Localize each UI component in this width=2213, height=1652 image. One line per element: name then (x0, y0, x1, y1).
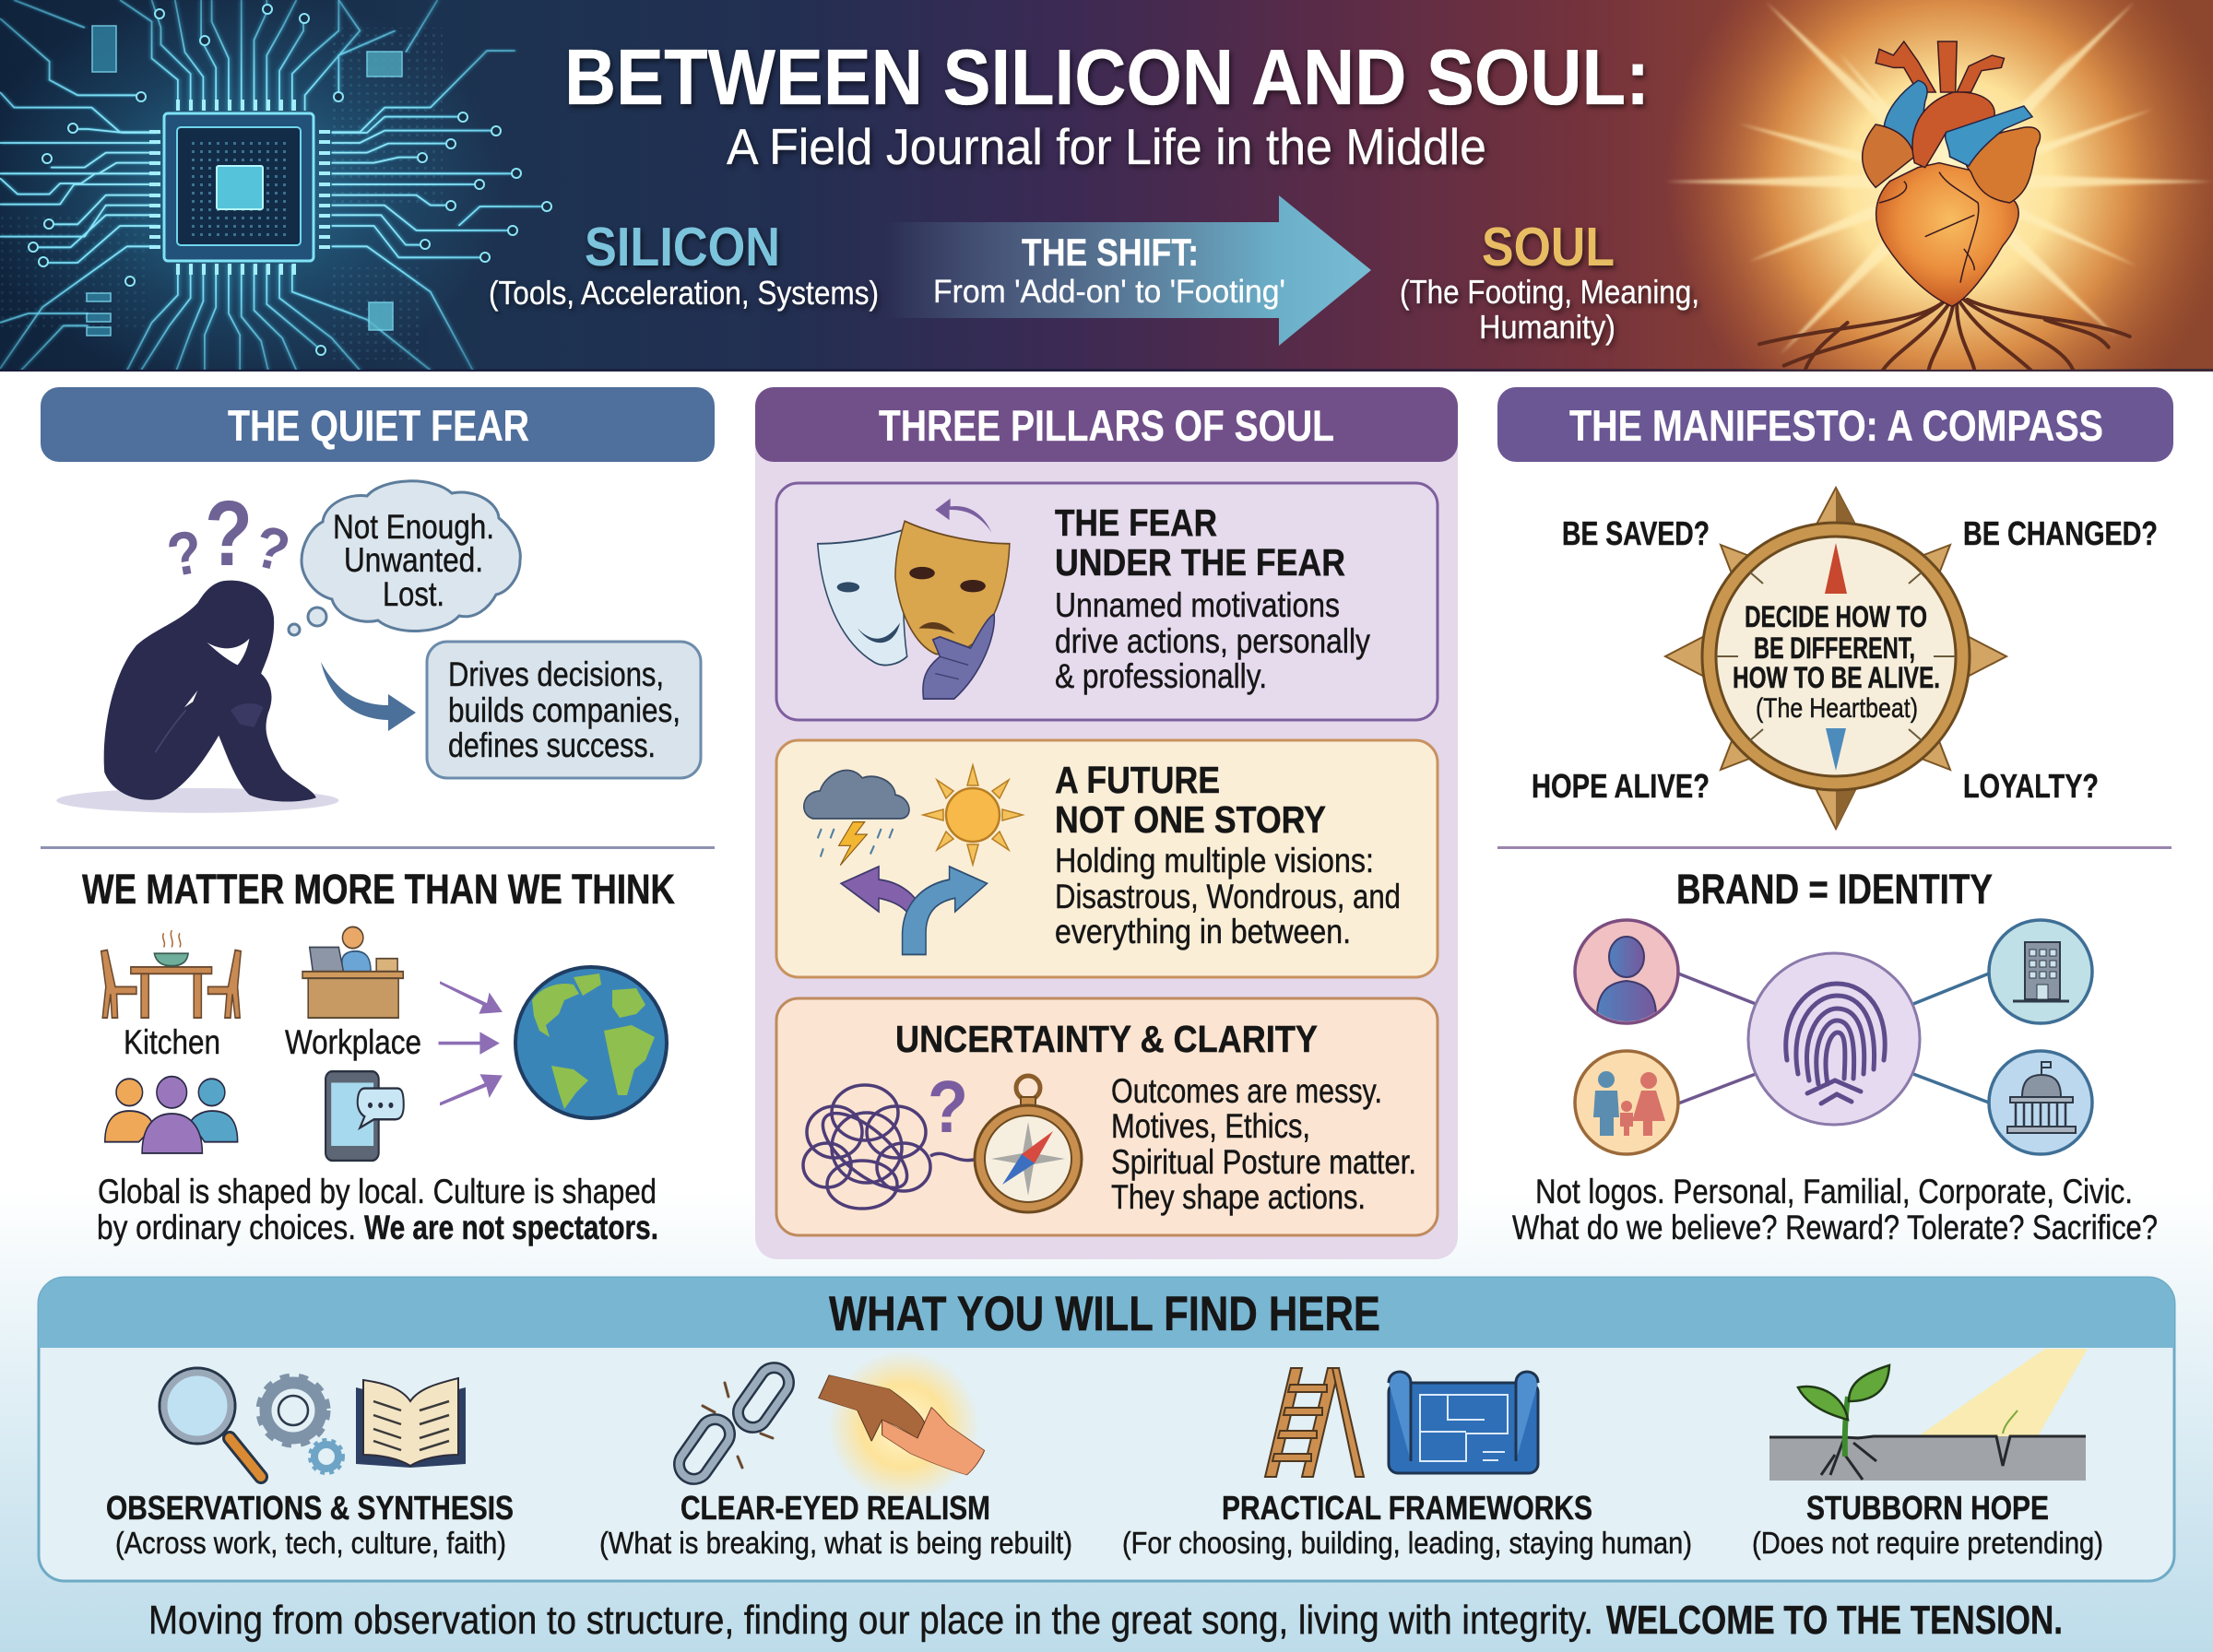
text: global is shaped by local: Global is shaped by local. Culture is shaped (98, 1173, 657, 1210)
icon: fingerprint (1748, 953, 1920, 1125)
callout: drives decisions: builds companies, (448, 691, 680, 729)
item: stubborn hope (1752, 1349, 2103, 1560)
icon: phone with speech bubble (325, 1071, 404, 1161)
icon: masks (818, 499, 1010, 699)
text: decide how to be different: HOW TO BE ALIVE. (1733, 661, 1940, 694)
callout: drives decisions: defines success. (448, 726, 656, 764)
labels: compass questions: BE CHANGED? (1963, 514, 2158, 552)
sublabel: for choosing: (For choosing, building, leading, staying human) (1122, 1526, 1692, 1560)
icon: gears (259, 1376, 343, 1473)
footer text: Moving from observation to structure, finding our place in the great song, living with integrity. (148, 1598, 1593, 1643)
thought bubble: Lost. (383, 575, 444, 613)
text: decide how to be different: (The Heartbeat) (1756, 693, 1918, 724)
icon: question marks: ? (248, 513, 296, 584)
heading: what you will find here: WHAT YOU WILL FIND HERE (829, 1287, 1380, 1341)
panel: the quiet fear (41, 387, 715, 1246)
icon: tangle (803, 1085, 974, 1209)
labels: compass questions: LOYALTY? (1963, 767, 2099, 805)
icon: blueprint (1389, 1372, 1538, 1473)
sublabel: what is breaking: (What is breaking, what is being rebuilt) (599, 1526, 1072, 1560)
callout: drives decisions: Drives decisions, (448, 655, 664, 693)
icon: corporate building (1989, 920, 2092, 1023)
heading: brand equals identity: BRAND = IDENTITY (1676, 866, 1993, 913)
card: a future not one story (776, 740, 1438, 977)
soul label: Humanity) (1479, 308, 1615, 346)
sublabel: does not require pretending: (Does not require pretending) (1752, 1526, 2103, 1560)
icon: ladder (1265, 1368, 1364, 1477)
icon: question marks: ? (205, 482, 253, 585)
icon: diverging arrows (841, 867, 987, 954)
header banner (0, 0, 2213, 372)
icon: pocket compass (975, 1076, 1082, 1212)
item: practical frameworks (1122, 1368, 1692, 1560)
item: clear-eyed realism (599, 1351, 1072, 1560)
heading: uncertainty and clarity: UNCERTAINTY & CLARITY (895, 1018, 1318, 1060)
icon: personal (1575, 920, 1678, 1023)
icon: question marks: ? (162, 516, 207, 590)
text: the fear under the fear: drive actions, personally (1055, 622, 1370, 660)
icon: workplace desk (302, 926, 403, 1018)
card: the fear under the fear (776, 483, 1438, 720)
icon: kitchen table (101, 930, 241, 1018)
icon: storm cloud (804, 771, 909, 866)
panel: the manifesto (1497, 387, 2173, 1246)
item: observations and synthesis (106, 1368, 514, 1560)
thought bubble: Not Enough. (333, 508, 494, 546)
text: decide how to be different: DECIDE HOW TO (1745, 600, 1927, 633)
icon: question mark: ? (928, 1066, 968, 1148)
soul label: SOUL (1482, 217, 1615, 277)
thought bubble (289, 481, 520, 635)
text: global is shaped by local: by ordinary choices. (97, 1209, 356, 1246)
icon: question marks (162, 482, 296, 590)
icon: light beam (1918, 1349, 2088, 1436)
text: a future not one story: Disastrous, Wondrous, and (1055, 878, 1401, 915)
icon: glowing heart with roots (1668, 0, 2213, 370)
icon: broken chain (673, 1362, 795, 1485)
soul label: (The Footing, Meaning, (1400, 273, 1699, 311)
text: a future not one story (1055, 759, 1401, 950)
heading: three pillars of soul (755, 387, 1458, 462)
card: uncertainty and clarity (776, 998, 1438, 1235)
arrows: local to global (439, 981, 503, 1106)
icon: civic building (1989, 1051, 2092, 1154)
heading: the quiet fear (41, 387, 715, 462)
icon: three people (105, 1077, 238, 1153)
icon: open book (356, 1378, 466, 1468)
heading: the quiet fear: THE QUIET FEAR (228, 401, 529, 450)
text: decide how to be different (1733, 600, 1940, 724)
arrow: the shift (885, 195, 1371, 346)
text: outcomes are messy (1111, 1072, 1416, 1216)
heading: three pillars of soul: THREE PILLARS OF SOUL (879, 401, 1334, 450)
sublabel: across work: (Across work, tech, culture, faith) (115, 1526, 506, 1560)
heading: the manifesto: THE MANIFESTO: A COMPASS (1569, 401, 2103, 450)
label: kitchen: Kitchen (124, 1023, 220, 1061)
text: outcomes are messy: Outcomes are messy. (1111, 1072, 1382, 1110)
footer text: WELCOME TO THE TENSION. (1606, 1598, 2063, 1643)
label: observations and synthesis: OBSERVATIONS & SYNTHESIS (106, 1489, 514, 1527)
silicon label: SILICON (585, 217, 780, 277)
title: BETWEEN SILICON AND SOUL: (564, 34, 1650, 122)
text: decide how to be different: BE DIFFERENT, (1754, 631, 1915, 665)
silicon label: (Tools, Acceleration, Systems) (489, 274, 879, 312)
shift label: THE SHIFT: (1022, 230, 1199, 274)
thought bubble: Unwanted. (344, 541, 483, 579)
text: a future not one story: Holding multiple visions: (1055, 842, 1374, 879)
heading: we matter more than we think: WE MATTER MORE THAN WE THINK (82, 866, 675, 913)
panel: what you will find here (39, 1278, 2174, 1581)
icon: cracked concrete (1769, 1436, 2086, 1481)
text: the fear under the fear (1055, 502, 1370, 695)
text: global is shaped by local: We are not spectators. (364, 1209, 658, 1246)
icon: sprout (1798, 1365, 2018, 1457)
heading: the manifesto (1497, 387, 2173, 462)
labels: compass questions: BE SAVED? (1562, 514, 1710, 552)
label: stubborn hope: STUBBORN HOPE (1806, 1489, 2049, 1527)
subtitle: A Field Journal for Life in the Middle (727, 118, 1486, 175)
shift description: From 'Add-on' to 'Footing' (933, 274, 1285, 310)
diagram: identity network (1575, 920, 2092, 1154)
icon: magnifier (160, 1368, 261, 1477)
label: workplace: Workplace (285, 1023, 421, 1061)
text: the fear under the fear: UNDER THE FEAR (1055, 541, 1345, 584)
labels: compass questions: HOPE ALIVE? (1532, 767, 1710, 805)
text: the fear under the fear: Unnamed motivations (1055, 586, 1340, 624)
text: outcomes are messy: They shape actions. (1111, 1178, 1366, 1216)
label: practical frameworks: PRACTICAL FRAMEWORKS (1222, 1489, 1592, 1527)
text: outcomes are messy: Motives, Ethics, (1111, 1107, 1310, 1145)
label: clear-eyed realism: CLEAR-EYED REALISM (680, 1489, 990, 1527)
text: a future not one story: A FUTURE (1055, 759, 1220, 801)
text: the fear under the fear: THE FEAR (1055, 502, 1217, 544)
text: a future not one story: NOT ONE STORY (1055, 798, 1326, 841)
icon: globe (515, 967, 667, 1118)
icon: compass (1665, 488, 2006, 829)
icon: crouching figure (56, 581, 338, 813)
silicon label (489, 217, 879, 312)
icon: circuit board with chip (0, 0, 551, 386)
text: a future not one story: everything in between. (1055, 913, 1351, 950)
text: outcomes are messy: Spiritual Posture matter. (1111, 1143, 1416, 1181)
icon: sun (923, 765, 1023, 865)
callout: drives decisions (427, 642, 701, 778)
text: not logos (1512, 1173, 2158, 1246)
labels: compass questions (1532, 514, 2158, 805)
soul label (1400, 217, 1699, 346)
panel: three pillars of soul (755, 387, 1458, 1259)
text: global is shaped by local (97, 1173, 658, 1246)
text: the fear under the fear: & professionally. (1055, 657, 1267, 695)
arrow: fear to decisions (321, 662, 416, 731)
icon: reaching hands (819, 1351, 985, 1502)
icon: family (1575, 1051, 1678, 1154)
